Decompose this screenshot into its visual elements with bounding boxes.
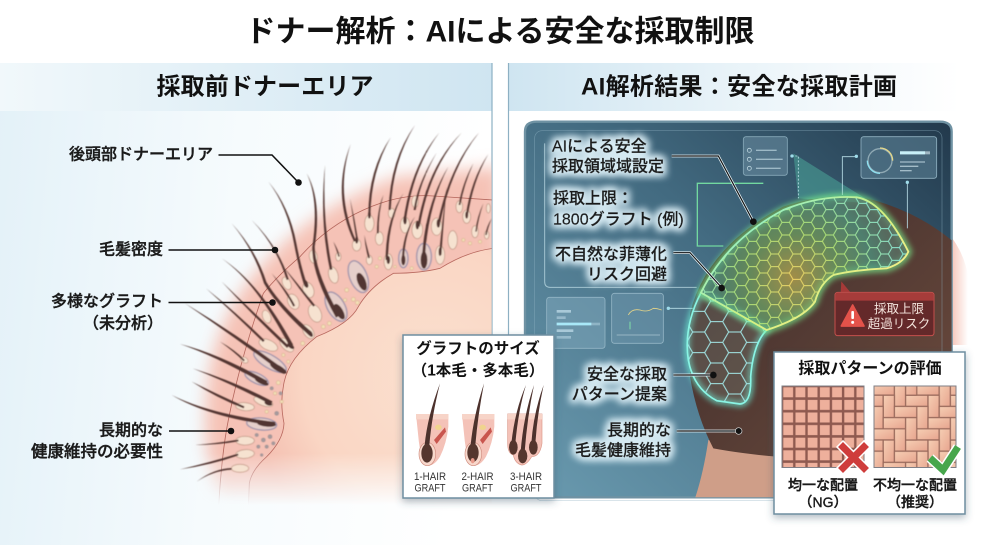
callout: harvest limit	[553, 190, 684, 228]
label: hair density	[99, 240, 278, 258]
window: bars	[547, 297, 605, 348]
tablet screen	[525, 122, 952, 497]
graft captions: 3-HAIR	[510, 471, 542, 483]
fat cells	[265, 238, 482, 413]
panel: AI tablet	[525, 122, 953, 501]
caption: uniform NG: （NG）	[798, 494, 848, 510]
callout: thinning risk	[555, 246, 667, 284]
label: hair density: 毛髪密度	[99, 240, 163, 258]
icon: 3-hair graft	[508, 385, 544, 465]
harvest zone: lower	[680, 290, 773, 407]
skin outside tablet	[952, 238, 968, 345]
label: long-term health	[31, 422, 234, 461]
scan bracket	[697, 183, 763, 246]
window: checklist	[743, 137, 787, 175]
window: line chart	[612, 293, 663, 343]
grid: uniform pattern	[782, 386, 864, 468]
callout: harvest limit: 採取上限：	[553, 190, 633, 208]
caption: uniform NG: 均一な配置	[788, 477, 858, 493]
icon: green check	[930, 447, 958, 470]
follicles and hair	[172, 125, 492, 482]
callout: safe pattern: 安全な採取	[587, 366, 667, 384]
neck skin	[695, 440, 774, 498]
large follicles	[243, 243, 431, 431]
hair mass	[690, 196, 953, 463]
grid: non-uniform pattern	[874, 386, 956, 468]
skin surface line	[219, 196, 493, 507]
callout: AI safe zone: AIによる安全	[552, 138, 647, 156]
icon: 2-hair graft	[462, 383, 494, 466]
panel dividers	[492, 63, 508, 336]
caption: uniform NG	[788, 477, 858, 510]
heading: AI result: AI解析結果：安全な採取計画	[581, 74, 897, 100]
icon: warning	[841, 305, 864, 326]
left labels	[31, 146, 302, 461]
skin layers	[205, 167, 500, 507]
callout: safe pattern	[572, 366, 667, 404]
pattern heading: 採取パターンの評価	[798, 360, 942, 378]
callout: AI safe zone: 採取領域域設定	[552, 158, 664, 176]
alert text	[868, 302, 930, 331]
window: gauge	[861, 137, 937, 178]
graft captions: 2-HAIR	[462, 471, 494, 483]
text bracket	[545, 143, 697, 287]
icon: 1-hair graft	[416, 383, 448, 466]
graft captions: GRAFT	[414, 482, 446, 494]
caption: non-uniform recommended	[873, 477, 957, 510]
graft heading: グラフトのサイズ	[416, 338, 540, 358]
analysis beam	[793, 153, 873, 203]
panel: before harvest header	[0, 63, 492, 111]
label: various grafts: （未分析）	[83, 314, 163, 332]
panel: AI result header	[509, 63, 960, 111]
callout: harvest limit: 1800グラフト (例)	[553, 210, 684, 228]
label: occipital donor area	[69, 146, 302, 186]
alert box	[835, 281, 934, 336]
alert text: 採取上限	[874, 302, 924, 316]
label: various grafts	[51, 292, 276, 332]
callout: thinning risk: リスク回避	[587, 266, 667, 284]
label: various grafts: 多様なグラフト	[51, 292, 163, 310]
icon: red cross	[843, 447, 864, 468]
label: long-term health: 健康維持の必要性	[31, 442, 163, 461]
graft captions: GRAFT	[462, 482, 493, 494]
callout: long-term health: 毛髪健康維持	[575, 440, 671, 460]
panel: graft sizes	[403, 335, 554, 498]
connector lines	[667, 154, 909, 310]
graft captions: 1-HAIR	[414, 471, 446, 483]
head	[690, 153, 953, 498]
title: ドナー解析：AIによる安全な採取制限	[246, 16, 754, 48]
skin glow	[205, 167, 500, 500]
callout: long-term health: 長期的な	[607, 422, 671, 440]
caption: non-uniform recommended: 不均一な配置	[873, 477, 957, 493]
callout: AI safe zone	[552, 138, 664, 176]
hair bulbs	[254, 211, 468, 427]
graft captions	[414, 471, 542, 494]
callout: long-term health	[575, 422, 671, 460]
label: long-term health: 長期的な	[99, 422, 163, 440]
panel: graft sizes: （1本毛・多本毛）	[412, 362, 544, 380]
harvest zone: upper	[697, 193, 913, 333]
callout: thinning risk: 不自然な菲薄化	[555, 246, 667, 264]
inner frame	[535, 131, 942, 501]
caption: non-uniform recommended: （推奨）	[887, 494, 943, 510]
panel: pattern evaluation	[774, 352, 965, 514]
right callout text	[552, 138, 684, 460]
follicles	[231, 196, 490, 472]
scalp illustration	[172, 125, 500, 507]
callout: safe pattern: パターン提案	[572, 386, 667, 404]
hairs	[172, 125, 492, 482]
label: occipital donor area: 後頭部ドナーエリア	[69, 146, 213, 164]
grey tissue cells	[255, 387, 282, 456]
callout lines	[672, 156, 757, 434]
heading: before harvest: 採取前ドナーエリア	[156, 74, 374, 100]
graft captions: GRAFT	[510, 482, 542, 494]
alert text: 超過リスク	[868, 316, 930, 331]
deep tissue	[248, 248, 493, 507]
